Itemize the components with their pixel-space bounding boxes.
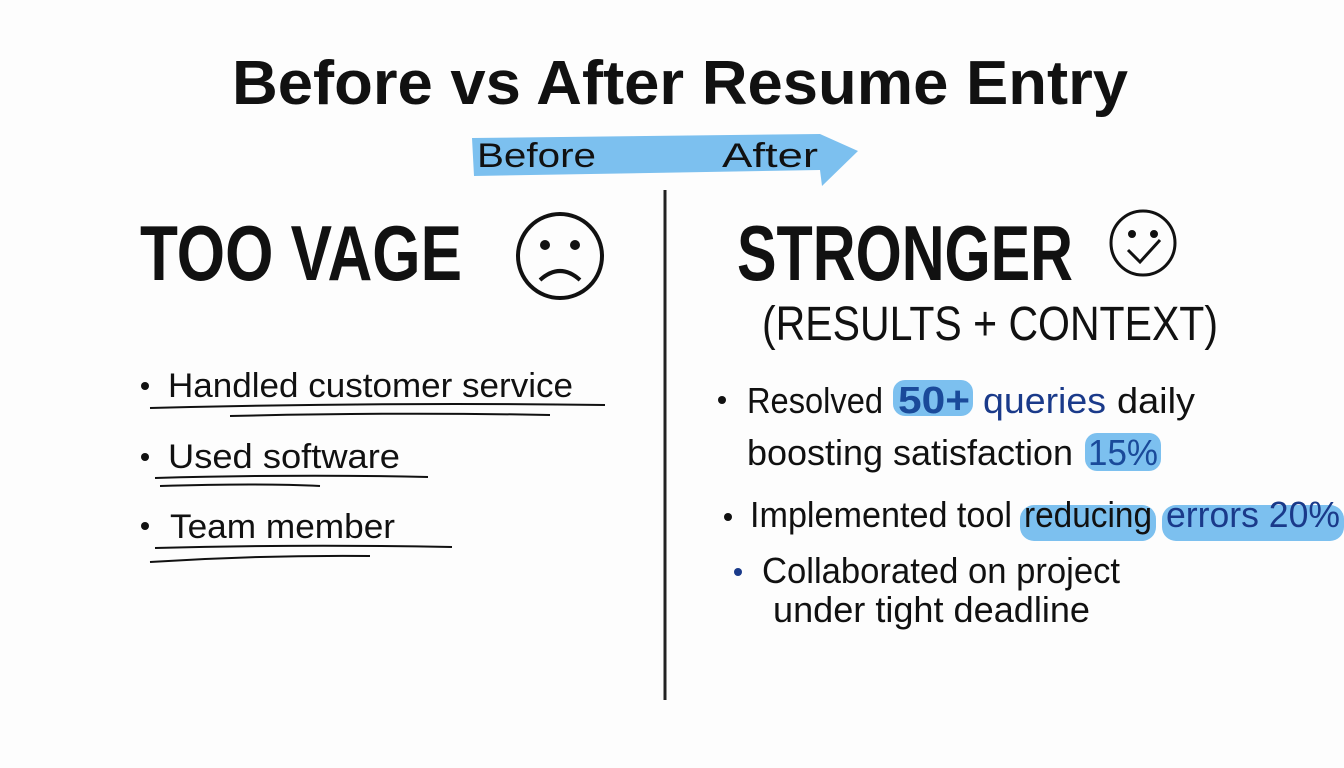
right list: strong bullets: Resolved bbox=[747, 380, 883, 421]
left list: vague bullets: Team member bbox=[170, 508, 395, 546]
right list: strong bullets bbox=[718, 380, 1344, 630]
right list: strong bullets: Implemented tool bbox=[750, 494, 1012, 535]
right list: strong bullets: 15% bbox=[1088, 432, 1158, 473]
icon: smiley face bbox=[1111, 211, 1175, 275]
arrow: before to after: After bbox=[722, 137, 818, 175]
left list: vague bullets bbox=[141, 367, 605, 562]
right list: strong bullets: Collaborated on project bbox=[762, 550, 1120, 591]
right list: strong bullets: under tight deadline bbox=[773, 589, 1090, 630]
right list: strong bullets: reducing bbox=[1024, 494, 1152, 535]
arrow: before to after: Before bbox=[477, 137, 596, 175]
heading: too vage: TOO VAGE bbox=[140, 209, 462, 297]
right list: strong bullets: 50+ bbox=[898, 380, 970, 422]
right list: strong bullets: errors 20% bbox=[1166, 494, 1340, 535]
right list: strong bullets: queries bbox=[983, 380, 1106, 421]
heading: stronger: STRONGER bbox=[737, 209, 1073, 297]
arrow: before to after bbox=[472, 134, 858, 186]
subheading: (RESULTS + CONTEXT) bbox=[762, 298, 1218, 351]
title: Before vs After Resume Entry bbox=[232, 49, 1129, 118]
left list: vague bullets: Used software bbox=[168, 438, 400, 476]
right list: strong bullets: boosting satisfaction bbox=[747, 432, 1073, 473]
left list: vague bullets: Handled customer service bbox=[168, 367, 573, 405]
icon: sad face bbox=[518, 214, 602, 298]
right list: strong bullets: daily bbox=[1117, 380, 1195, 421]
